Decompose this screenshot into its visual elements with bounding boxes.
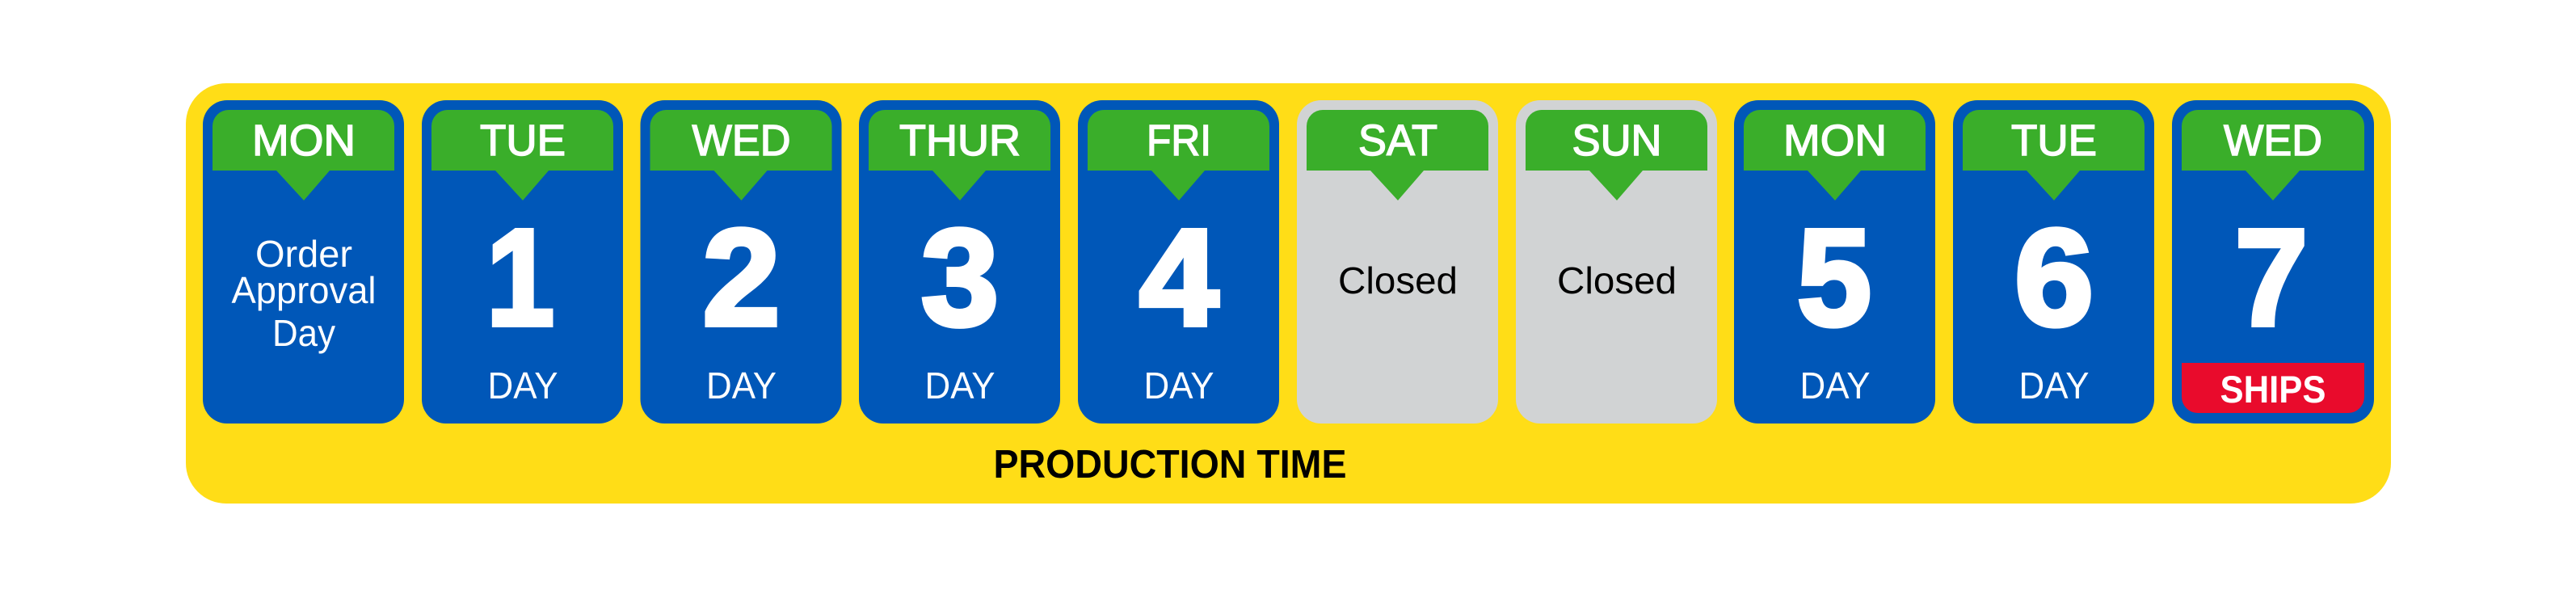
card: Monday day 5 [1734,100,1935,424]
card: Friday day 4: FRI [1147,116,1211,165]
card: Friday day 4 [1078,100,1279,424]
card: Wednesday day 7 ships: SHIPS [2220,368,2326,411]
card: Tuesday day 6: TUE [2011,116,2097,165]
card: Tuesday day 1: DAY [488,365,558,407]
label: production time: PRODUCTION TIME [994,443,1346,487]
card: Wednesday day 2: 2 [703,201,781,355]
card: Tuesday day 1: 1 [486,201,554,355]
card: Saturday closed: SAT [1358,116,1437,165]
card: Wednesday day 2: DAY [706,365,777,407]
card: Monday order approval: Order [255,233,352,275]
card: Friday day 4: 4 [1139,201,1219,355]
card: Saturday closed: Closed [1338,259,1458,301]
card: Monday order approval [203,100,404,424]
card: Thursday day 3: DAY [924,365,995,407]
card: Monday order approval: Approval [231,269,377,311]
card: Thursday day 3 [859,100,1060,424]
card: Thursday day 3: 3 [921,201,999,355]
card: Thursday day 3: THUR [899,116,1021,165]
card: Friday day 4: DAY [1144,365,1214,407]
card: Wednesday day 2: WED [692,116,790,165]
card: Sunday closed: Closed [1557,259,1677,301]
card: Tuesday day 6: 6 [2014,201,2094,355]
card: Tuesday day 1: TUE [480,116,566,165]
card: Sunday closed: SUN [1572,116,1661,165]
card: Monday day 5: MON [1783,116,1887,165]
card: Tuesday day 1 [422,100,623,424]
card: Sunday closed [1516,100,1717,424]
card: Wednesday day 7 ships: 7 [2235,201,2308,355]
card: Wednesday day 7 ships [2172,100,2374,424]
card: Monday day 5: DAY [1800,365,1870,407]
card: Monday day 5: 5 [1797,201,1871,355]
panel: production schedule [186,83,2391,504]
card: Tuesday day 6: DAY [2018,365,2090,407]
card: Monday order approval: MON [252,116,356,165]
card: Wednesday day 2 [640,100,842,424]
card: Wednesday day 7 ships: WED [2224,116,2322,165]
card: Tuesday day 6 [1953,100,2154,424]
card: Monday order approval: Day [272,312,335,354]
card: Saturday closed [1297,100,1498,424]
